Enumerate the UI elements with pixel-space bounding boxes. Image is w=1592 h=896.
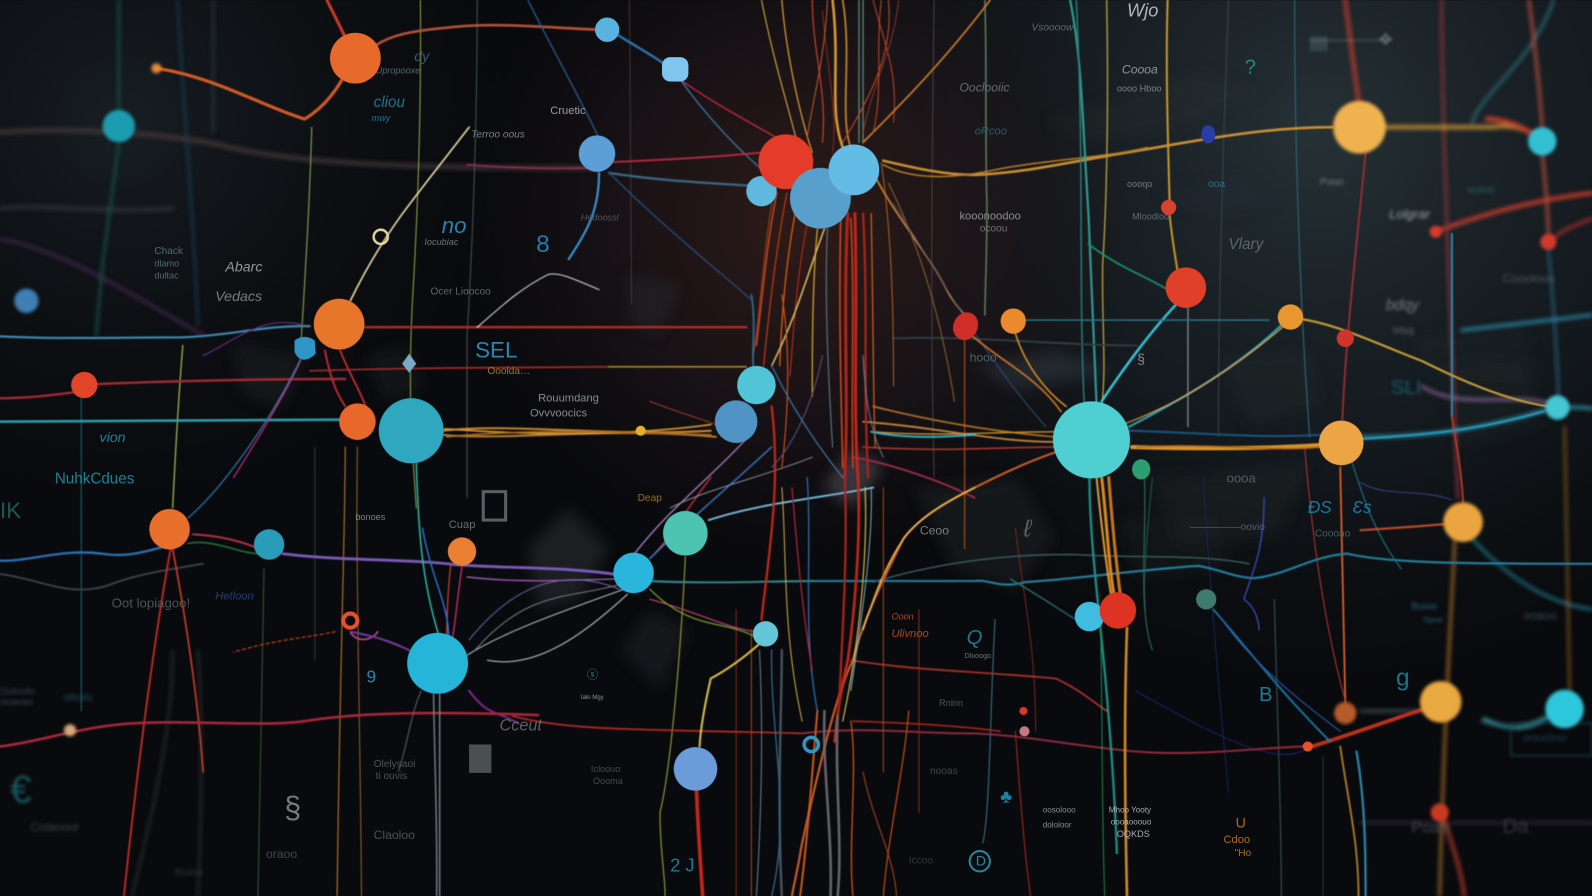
node: blue small bottom center (804, 737, 818, 752)
sketch labels: lower left (0, 667, 694, 878)
sketch labels: upper right: oooqo (1127, 179, 1152, 189)
node: pale teal (753, 621, 778, 646)
sketch labels: top left: no (442, 213, 467, 238)
sketch labels: top left: 8 (536, 231, 550, 258)
sketch labels: lower left: € (10, 768, 32, 811)
sketch labels: center right: ℓ (1022, 515, 1032, 542)
sketch labels: upper right: ⟡ (1379, 28, 1392, 50)
node: teal left (103, 110, 135, 142)
sketch labels: lower right: D (976, 853, 986, 869)
node: turquoise center (663, 511, 708, 556)
node: yellow right (1319, 421, 1364, 465)
sketch labels: lower left: Colanool (30, 820, 79, 834)
node: orange left hub (314, 299, 364, 350)
sketch labels: center right: Boioo (1411, 601, 1438, 612)
node: light blue hub small (746, 176, 777, 206)
sketch labels: top left: dlamo (154, 258, 179, 268)
sketch labels: lower right: ooooioo (1523, 730, 1567, 744)
sketch labels: center right: Dpoo (1423, 616, 1443, 625)
sketch labels: top left: cliou (374, 94, 405, 111)
sketch labels: lower right: Da (1503, 816, 1529, 838)
sketch labels: center left: Cuap (449, 519, 475, 531)
node: red left (71, 372, 97, 398)
node: red small right B (1540, 234, 1556, 250)
sketch labels: lower right: OQKDS (1117, 829, 1150, 839)
sketch labels: lower right (909, 665, 1592, 871)
sketch labels: center right: Dlooogo (965, 652, 991, 660)
sketch labels: lower left: Olelysaoi (374, 759, 415, 770)
node: steel blue center (715, 400, 757, 443)
node: large turquoise hub (1053, 401, 1130, 478)
sketch labels: lower left: ouavao (0, 697, 34, 708)
sketch labels: lower left: 2 (670, 854, 680, 875)
node: orange lower left (149, 509, 190, 550)
node: red-orange terminal (1303, 741, 1313, 752)
sketch labels: center right (891, 351, 1557, 660)
nodes: out-of-focus right side (14, 101, 1584, 822)
sketch labels: center left: Deap (638, 493, 662, 504)
node: red right (1166, 267, 1206, 308)
sketch labels: upper right: Cooolooo (1503, 272, 1555, 286)
sketch labels: lower right: Mhoo Yooty (1109, 805, 1152, 814)
node: yellow dot (636, 426, 646, 436)
sketch labels: lower left: Cceut (500, 716, 543, 734)
node: ring on yellow thread (374, 230, 388, 244)
sketch labels: center left: Ovvvoocics (530, 408, 587, 420)
node: navy (1201, 125, 1215, 143)
sketch labels: center right: ooaoo (1523, 609, 1557, 623)
node: yellow top right (1333, 101, 1386, 154)
sketch labels: center right: oooa (1226, 471, 1256, 486)
node: pale blue left (14, 289, 39, 313)
sketch labels: upper right: Pooo (1320, 177, 1344, 188)
sketch labels: top left: Vedacs (215, 289, 262, 305)
node: cyan center (613, 553, 654, 593)
sketch labels: lower left: ti ouvis (376, 771, 407, 782)
node: light blue top (662, 57, 688, 81)
sketch labels: upper right: oooo Hboo (1117, 84, 1161, 94)
sketch labels: top left (154, 49, 620, 305)
node: red-orange small bottom (1431, 803, 1449, 822)
sketch labels: top left: Terroo oous (471, 129, 525, 140)
sketch labels: lower right: B (1259, 684, 1273, 706)
node: red hub (758, 134, 813, 189)
sketch labels: center right: hooo (970, 351, 997, 365)
sketch labels: upper right: kooonoodoo (959, 211, 1021, 223)
sketch labels: upper right: llll (1310, 34, 1328, 56)
node: cyan large (407, 633, 468, 694)
sketch labels: lower right: Cdoo (1223, 834, 1250, 846)
sketch labels: lower left: Ouloolo (0, 687, 35, 698)
node: cyan lower center (1075, 602, 1104, 631)
sketch labels: top left: Chack (154, 246, 184, 257)
sketch labels: lower left: Boaos (175, 867, 203, 878)
node: blue top (595, 18, 619, 42)
sketch labels: top left: Hedoossl (581, 213, 620, 223)
sketch labels: lower right: U (1236, 816, 1246, 832)
node: pale diamond (402, 354, 416, 373)
sketch labels: upper right: ? (1245, 56, 1256, 78)
node: orange small right (1001, 308, 1026, 334)
node: cyan bottom right (1545, 690, 1584, 728)
sketch labels: center right: Coooao (1315, 528, 1351, 539)
sketch labels: lower right: Rnlnn (939, 698, 963, 708)
sketch labels: lower left: Claoloo (374, 828, 415, 842)
node: cyan top right (1528, 127, 1556, 156)
node: grey-green ring (1196, 589, 1216, 609)
sketch labels: lower right: Poao (1411, 819, 1449, 837)
node: pale cyan right (1545, 395, 1570, 420)
sketch labels: top left: dultac (154, 270, 179, 280)
sketch labels: upper right: ooioo (1467, 184, 1494, 196)
sketch labels: center right: ĐS (1308, 497, 1332, 517)
sketch labels: lower left: Oooma (593, 776, 624, 786)
sketch labels: upper right: Wjo (1127, 0, 1158, 20)
sketch labels: top left: Ocer Lioocoo (430, 287, 491, 298)
sketch labels: lower right: "Ho (1235, 848, 1252, 859)
node: blue near orange (294, 337, 316, 360)
sketch labels: center left: NuhkCdues (55, 471, 135, 488)
sketch labels: center right: Ulivnoo (891, 628, 929, 640)
sketch labels: lower right: Iccoo (909, 855, 933, 866)
node: teal lower left (254, 529, 284, 560)
node: red upper small lower (1019, 707, 1027, 715)
sketch labels: lower right: nooas (930, 766, 958, 777)
sketch labels: center right: § (1137, 352, 1145, 368)
node: red small right A (1430, 226, 1442, 238)
sketch labels: upper right: Mloodloo (1132, 212, 1169, 222)
sketch labels: upper right: ———————— (1310, 35, 1392, 46)
smudges: dark grey sketch marks (234, 71, 1543, 691)
node: light blue hub (828, 144, 879, 195)
sketch labels: center left: bonoes (355, 512, 386, 522)
sketch labels: lower left: ⓢ (587, 668, 598, 681)
node: orange top (330, 33, 381, 84)
sketch labels: center right: Ceoo (920, 523, 949, 537)
node: rust hatched (1334, 702, 1356, 724)
node: teal large (379, 398, 444, 463)
sketch labels: lower right: oosolooo (1043, 805, 1076, 814)
sketch labels: center right: Ɛs (1352, 497, 1372, 517)
sketch labels: lower left: § (284, 791, 301, 825)
sketch labels: lower right: oooaooouo (1111, 818, 1152, 827)
sketch labels: top left: Abarc (224, 259, 263, 275)
sketch labels: top left: Upropooxe (376, 65, 420, 75)
node: blue hub (790, 168, 851, 229)
node: hatched red (949, 308, 983, 344)
nodes: sharp circles (71, 18, 1364, 791)
node: orange small center (448, 537, 476, 566)
sketch labels: center left: Ooolda… (487, 366, 530, 377)
sketch labels: lower left: oraoo (266, 847, 297, 861)
sketch labels: upper right: ocoou (980, 224, 1007, 235)
sketch labels: center right: Ooon (891, 612, 914, 622)
node: pale left terminal (64, 724, 76, 736)
node: small pink-orange hook (343, 613, 357, 628)
sketch labels: center left: SEL (475, 338, 517, 363)
sketch labels: upper right: Vlary (1229, 236, 1265, 253)
sketch labels: center left: Oot lopiagoo! (112, 595, 190, 610)
node: small orange terminal (151, 63, 161, 73)
node: orange right (1278, 304, 1303, 330)
sketch labels: top left: Cruetic (550, 105, 586, 117)
sketch labels: center right: Q (967, 627, 983, 649)
node: pale pink (1019, 726, 1030, 736)
sketch labels: lower left: J (685, 854, 694, 875)
sketch labels: upper right: bdqy (1386, 297, 1420, 314)
node: orange middle left (339, 403, 376, 440)
node: red lower center (1100, 592, 1136, 629)
sketch labels: lower left: Ialo Mgy (581, 694, 605, 701)
sketch labels: center left (0, 338, 662, 610)
central thread bundle (609, 0, 990, 896)
sketch labels: lower right: g (1396, 665, 1410, 692)
node: blue upper (579, 135, 615, 172)
node: small red upper right (1161, 200, 1176, 215)
node: pale cyan center (737, 366, 776, 404)
node: yellow lower right (1443, 502, 1483, 542)
sketch labels: upper right: Lolgrar (1389, 207, 1431, 222)
sketch labels: center left: Hetloon (215, 590, 254, 602)
node: green drop (1132, 459, 1150, 479)
sketch labels: center right: SLI (1391, 377, 1421, 399)
sketch labels: center right: —————oovio (1190, 522, 1265, 533)
sketch labels: top left: Iocubiac (424, 237, 459, 247)
sketch labels: upper right: ooa (1208, 179, 1225, 190)
sketch labels: upper right: lolyg (1393, 325, 1414, 336)
sketch labels: center left: IK (0, 498, 21, 523)
sketch labels: center left: Rouumdang (538, 392, 599, 404)
sketch labels: lower left: oholo (63, 690, 93, 704)
node: yellow bottom right (1420, 681, 1462, 723)
sketch labels: lower right: dololoor (1043, 821, 1072, 830)
sketch labels: lower left: 9 (367, 667, 376, 687)
sketch labels: upper right: Vsoooow (1032, 23, 1074, 34)
sketch labels: top left: dy (414, 49, 430, 65)
node: red on right vertical (1337, 330, 1354, 347)
sketch labels: upper right: Coooa (1122, 62, 1158, 76)
sketch labels: top left: mwy (372, 113, 392, 123)
sketch labels: center left: vion (100, 430, 126, 446)
sketch labels: lower right: ♣ (1000, 785, 1012, 806)
sketch labels: upper right (959, 0, 1555, 336)
sketch labels: lower left: Icloouo (591, 764, 620, 774)
sketch labels: upper right: oRcoo (975, 125, 1007, 137)
sketch labels: upper right: Ooclooiic (959, 81, 1010, 95)
node: periwinkle (674, 747, 717, 791)
